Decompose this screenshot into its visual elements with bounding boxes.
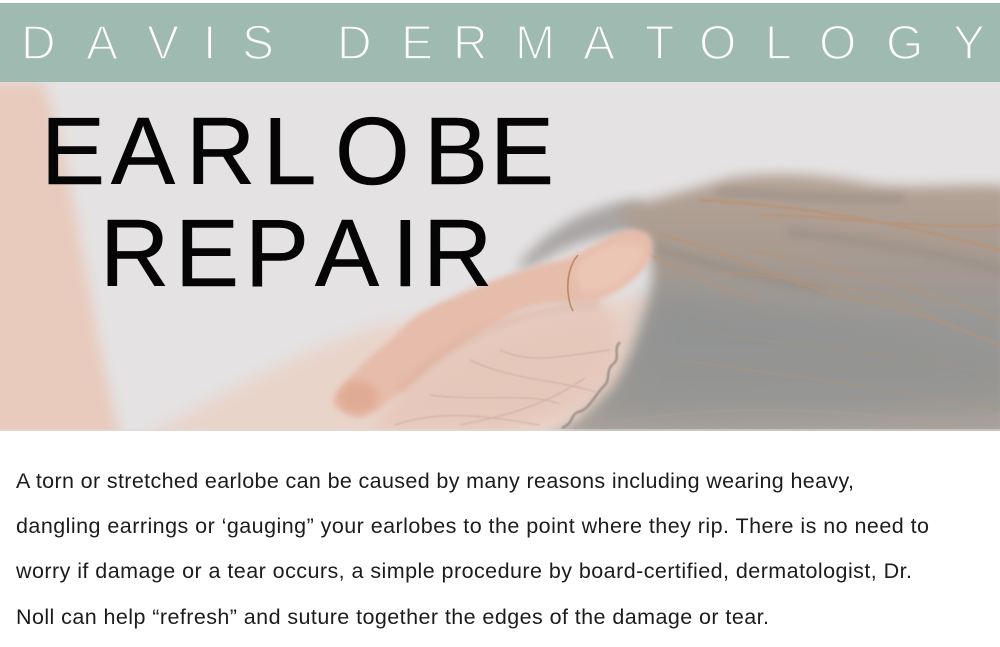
photo: hoop earring: [568, 255, 578, 311]
body line 3: worry if damage or a tear occurs, a simple procedure by board-certified, dermatologist, Dr.: [15, 559, 912, 583]
photo: ear: [333, 230, 652, 431]
photo: dark under-hair: [590, 290, 1000, 420]
photo: bottom edge fade: [0, 429, 1000, 431]
title: EARLOBE REPAIR: [41, 98, 554, 307]
body line 4: Noll can help “refresh” and suture together the edges of the damage or tear.: [16, 605, 769, 629]
photo: ear inner shading: [370, 305, 620, 431]
photo: shoulder: [0, 82, 122, 440]
title line 1: EARLOBE: [41, 98, 554, 205]
photo: warm hair strands: [649, 198, 1000, 415]
photo: lobe tip: [338, 381, 378, 413]
photo: helix crease shadow: [400, 304, 600, 392]
hero photo: ear and hair: [0, 82, 1000, 445]
header text: DAVIS DERMATOLOGY: [21, 17, 985, 70]
photo: grey hair above ear: [516, 200, 660, 268]
photo: neck skin: [154, 294, 648, 431]
body line 2: dangling earrings or ‘gauging” your earlobes to the point where they rip. There is no need to: [16, 514, 929, 538]
title line 2: REPAIR: [100, 200, 492, 307]
photo: ear helix: [333, 230, 652, 417]
body line 1: A torn or stretched earlobe can be caused by many reasons including wearing heavy,: [16, 469, 854, 493]
photo: fine hairs near ear: [395, 350, 610, 425]
body paragraph: [15, 469, 929, 629]
photo: dark jagged hair edge: [562, 342, 620, 428]
header banner: [0, 3, 1000, 82]
photo: ear rim highlight: [578, 246, 640, 290]
photo: dark hair bands: [660, 187, 931, 260]
photo: hair mass: [545, 174, 1000, 440]
